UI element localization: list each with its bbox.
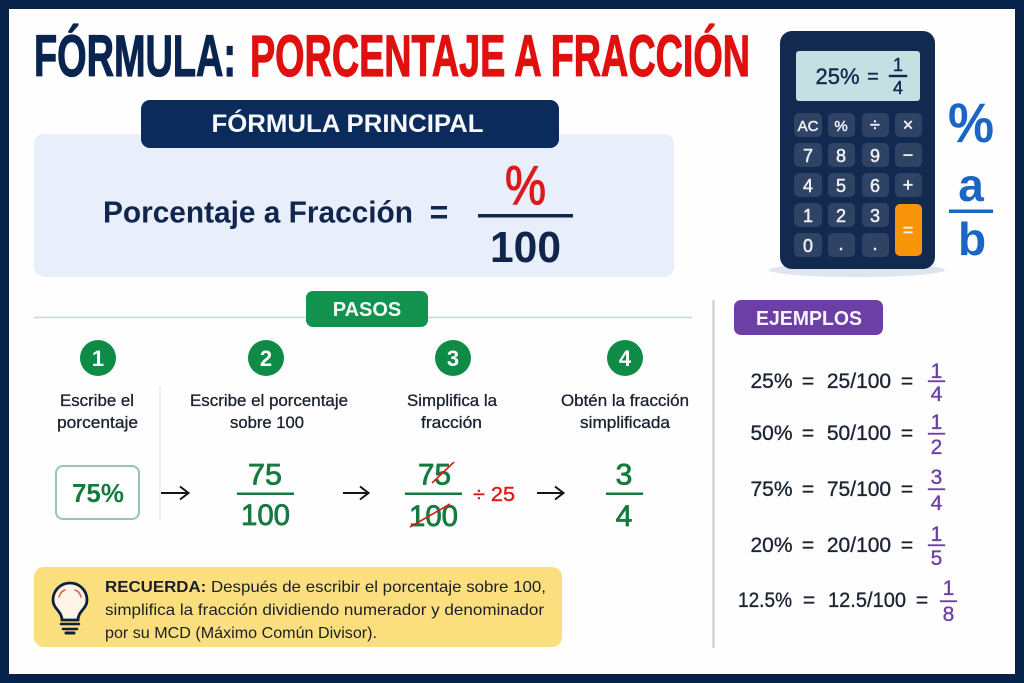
calculator icon: 7: [803, 146, 813, 166]
step 1: [56, 340, 139, 519]
heading: examples: [734, 300, 883, 335]
step 2: 2: [260, 346, 272, 371]
icon: percent and a/b symbols: a: [958, 159, 984, 211]
step 2: Escribe el porcentaje: [190, 392, 348, 410]
divide by 25: ÷ 25: [473, 484, 515, 506]
example: 25%: 1: [931, 360, 942, 383]
calculator icon: 4: [803, 176, 813, 196]
example: 20%: 20%: [750, 534, 793, 557]
heading: steps: PASOS: [333, 299, 401, 321]
example: 25%: 25/100: [827, 370, 891, 393]
example: 20%: 1: [931, 523, 942, 546]
example: 12.5%: 8: [943, 603, 954, 626]
reminder text: [105, 579, 546, 642]
reminder text: RECUERDA: Después de escribir el porcentaje sobre 100,: [105, 579, 546, 596]
formula fraction: %: [505, 154, 546, 216]
title: [34, 24, 750, 89]
step 4: Obtén la fracción: [561, 392, 689, 410]
icon: percent and a/b symbols: b: [958, 213, 986, 265]
example: 20%: =: [901, 534, 913, 557]
formula fraction: [478, 154, 573, 272]
example: 12.5%: 12.5/100: [828, 589, 906, 612]
reminder text: simplifica la fracción dividiendo numerador y denominador: [105, 602, 545, 619]
example: 20%: 5: [931, 547, 942, 570]
example: 75%: =: [802, 478, 814, 501]
heading: main formula: [141, 100, 559, 148]
calculator icon: +: [903, 175, 913, 195]
calculator icon: 1: [893, 55, 903, 75]
step 2: [190, 340, 348, 532]
calculator icon: 2: [836, 206, 846, 226]
example: 50%: 50%: [750, 422, 793, 445]
example: 12.5%: 12.5%: [738, 589, 792, 612]
title: FÓRMULA:: [34, 24, 236, 89]
calculator icon: ×: [903, 115, 913, 135]
calculator icon: .: [838, 234, 844, 254]
step 1: porcentaje: [57, 414, 138, 432]
example: 25%: =: [802, 370, 814, 393]
calculator icon: AC: [798, 118, 819, 135]
step 2: 100: [241, 499, 290, 532]
example: 25%: 4: [931, 383, 943, 406]
icon: percent and a/b symbols: [948, 91, 994, 265]
step 4: [561, 340, 689, 533]
calculator icon: 4: [893, 78, 903, 98]
panel: main formula: [34, 100, 674, 277]
step 1: Escribe el: [60, 392, 134, 410]
example: 20%: 20/100: [827, 534, 891, 557]
example: 75%: =: [901, 478, 913, 501]
example: 50%: =: [901, 422, 913, 445]
calculator icon: %: [834, 118, 848, 135]
heading: examples: EJEMPLOS: [756, 308, 862, 330]
heading: main formula: FÓRMULA PRINCIPAL: [212, 108, 484, 138]
calculator icon: .: [872, 234, 878, 254]
example: 75%: 75/100: [827, 478, 891, 501]
arrow 1: [161, 486, 188, 500]
calculator icon: 3: [870, 206, 880, 226]
formula label: Porcentaje a Fracción: [103, 194, 413, 230]
heading: steps: [34, 291, 692, 327]
icon: percent and a/b symbols: %: [948, 91, 994, 154]
step 4: 4: [619, 346, 632, 371]
example: 20%: [750, 523, 945, 570]
calculator icon: 0: [803, 236, 813, 256]
step 3: 3: [447, 346, 459, 371]
formula fraction: 100: [490, 223, 561, 272]
calculator icon: =: [867, 66, 879, 88]
step 3: 75: [418, 458, 451, 492]
example: 75%: 4: [931, 492, 943, 515]
step 3: fracción: [421, 414, 482, 432]
equals sign: =: [430, 194, 448, 230]
example: 50%: [750, 411, 945, 459]
step 3: Simplifica la: [407, 392, 498, 410]
example: 12.5%: 1: [943, 577, 954, 600]
calculator icon: 1: [803, 206, 813, 226]
strike-through marks: [410, 462, 454, 527]
arrow 2: [343, 486, 368, 500]
arrow 3: [537, 486, 564, 500]
calculator icon: ÷: [870, 115, 880, 135]
calculator icon: 6: [870, 176, 880, 196]
calculator icon: =: [903, 220, 913, 240]
example: 50%: 1: [931, 411, 942, 434]
example: 75%: 75%: [750, 478, 793, 501]
step 3: [405, 340, 515, 533]
example: 25%: 25%: [750, 370, 793, 393]
example: 25%: [750, 360, 945, 406]
example: 25%: =: [901, 370, 913, 393]
reminder text: por su MCD (Máximo Común Divisor).: [105, 625, 377, 642]
example: 50%: =: [802, 422, 814, 445]
step 1: 1: [92, 346, 104, 371]
step 4: 4: [616, 500, 632, 533]
example: 75%: [750, 466, 945, 515]
step 2: 75: [248, 458, 282, 492]
step 4: simplificada: [580, 414, 671, 432]
calculator icon: 8: [836, 146, 846, 166]
calculator icon: 25%: [815, 64, 860, 89]
example: 12.5%: [738, 577, 957, 626]
icon: light bulb: [53, 583, 87, 633]
calculator icon: [769, 31, 945, 277]
callout: reminder: [34, 567, 562, 647]
example: 75%: 3: [931, 466, 942, 489]
step 1: 75%: [72, 478, 124, 508]
example: 12.5%: =: [916, 589, 928, 612]
calculator icon: 9: [870, 146, 880, 166]
step 4: 3: [616, 458, 632, 492]
calculator icon: 5: [836, 176, 846, 196]
step 2: sobre 100: [230, 414, 304, 432]
step 3: 100: [409, 500, 458, 533]
calculator icon: −: [903, 145, 913, 165]
example: 50%: 2: [931, 436, 942, 459]
example: 12.5%: =: [803, 589, 815, 612]
title: PORCENTAJE A FRACCIÓN: [250, 24, 750, 89]
example: 50%: 50/100: [827, 422, 891, 445]
example: 20%: =: [802, 534, 814, 557]
